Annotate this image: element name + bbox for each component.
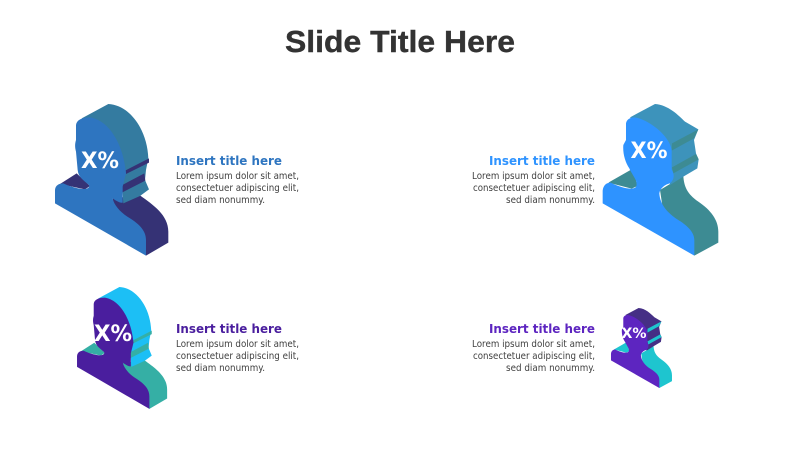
- text block top-left: Insert title here: [176, 153, 282, 168]
- icon: person bottom-left: [77, 287, 167, 409]
- text block top-right: [472, 153, 595, 206]
- icon: person bottom-left: X%: [94, 322, 132, 347]
- text block bottom-left: Insert title here: [176, 321, 282, 336]
- icon: person top-left: X%: [81, 149, 119, 174]
- text block top-right: Insert title here: [489, 153, 595, 168]
- text block bottom-right: Insert title here: [489, 321, 595, 336]
- text block bottom-left: Lorem ipsum dolor sit amet,: [176, 339, 299, 350]
- text block top-left: consectetuer adipiscing elit,: [176, 183, 299, 194]
- text block bottom-right: [472, 321, 595, 374]
- text block bottom-right: consectetuer adipiscing elit,: [473, 351, 595, 362]
- icon: person top-right: [603, 104, 718, 256]
- title: Slide Title Here: [285, 24, 515, 59]
- text block top-left: [176, 153, 299, 206]
- text block top-right: consectetuer adipiscing elit,: [473, 183, 595, 194]
- text block top-right: Lorem ipsum dolor sit amet,: [472, 171, 595, 182]
- text block bottom-left: consectetuer adipiscing elit,: [176, 351, 299, 362]
- icon: person top-right: X%: [630, 139, 668, 164]
- text block bottom-right: sed diam nonummy.: [506, 363, 595, 374]
- text block bottom-right: Lorem ipsum dolor sit amet,: [472, 339, 595, 350]
- text block bottom-left: [176, 321, 299, 374]
- icon: person bottom-right: [611, 308, 672, 388]
- icon: person bottom-right: X%: [622, 326, 646, 342]
- text block top-left: Lorem ipsum dolor sit amet,: [176, 171, 299, 182]
- text block bottom-left: sed diam nonummy.: [176, 363, 265, 374]
- text block top-left: sed diam nonummy.: [176, 195, 265, 206]
- text block top-right: sed diam nonummy.: [506, 195, 595, 206]
- icon: person top-left: [55, 104, 168, 256]
